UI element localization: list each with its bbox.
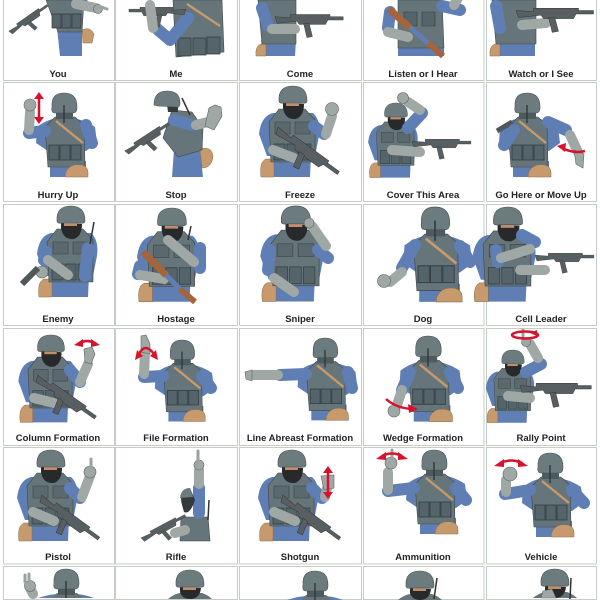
- panel: Hostage: [116, 204, 238, 326]
- panel: Pistol: [4, 448, 114, 564]
- icon: soldier with clenched hand raised: [259, 86, 341, 190]
- label: Dog: [414, 314, 432, 325]
- label: Freeze: [285, 190, 315, 201]
- icon: soldier raising arm above head: [368, 92, 471, 178]
- icon: soldier from back with raised hand and red arrows: [135, 335, 214, 421]
- label: Listen or I Hear: [388, 69, 458, 80]
- icon: soldier with finger pointing up holding rifle: [17, 450, 101, 555]
- icon: soldier holding rifle across body: [137, 208, 200, 302]
- icon: soldier arm lowered with red sweep arrow: [386, 336, 462, 422]
- panel: Wedge Formation: [364, 328, 484, 446]
- label: Shotgun: [281, 552, 319, 563]
- icon: soldier with raised hand and red up-down arrow: [258, 450, 342, 555]
- panel: Vehicle: [486, 448, 596, 564]
- icon: soldier reaching down with open hand: [378, 207, 472, 302]
- icon: soldier signalling watch: [490, 0, 594, 56]
- label: Rifle: [166, 552, 186, 563]
- icon: soldier with arm across chest and SMG: [473, 207, 594, 302]
- label: Hurry Up: [38, 190, 79, 201]
- label: Wedge Formation: [383, 433, 463, 444]
- icon: soldier pointing at self: [129, 0, 224, 57]
- label: Cover This Area: [387, 190, 460, 201]
- icon: soldier pointing at you: [8, 0, 107, 56]
- panel: Freeze: [240, 82, 362, 202]
- label: Enemy: [42, 314, 74, 325]
- icon: soldier holding a pistol: [22, 206, 97, 297]
- icon: soldier with raised hand and red arc arrow: [18, 335, 100, 434]
- panel: Listen or I Hear: [364, 0, 484, 80]
- label: Go Here or Move Up: [495, 190, 587, 201]
- icon: soldier with hand to eye: [260, 206, 328, 302]
- panel: bottom row cell 5: [486, 566, 596, 600]
- panel: You: [4, 0, 114, 80]
- icon: soldier head and mask: [168, 570, 212, 599]
- label: Column Formation: [16, 433, 100, 444]
- panel: Cover This Area: [364, 82, 484, 202]
- label: Pistol: [45, 552, 71, 563]
- panel: bottom row cell 4: [364, 566, 484, 600]
- panel: Rifle: [116, 448, 238, 564]
- icon: soldier beckoning: [256, 0, 343, 56]
- icon: soldier with raised fist and red up-down arrow: [24, 92, 97, 177]
- icon: soldier with arm extended sideways: [245, 338, 357, 420]
- icon: soldier from back with raised fist and red arrow: [494, 453, 584, 537]
- icon: soldier with arm forward and red arrow: [497, 93, 585, 177]
- panel: Column Formation: [4, 328, 114, 446]
- panel: Cell Leader: [473, 204, 596, 326]
- icon: soldier with arm straight up: [140, 451, 210, 551]
- panel: Shotgun: [240, 448, 362, 564]
- icon: soldier head and mask with antenna: [398, 571, 442, 600]
- panel: bottom row cell 1: [4, 566, 114, 600]
- panel: Ammunition: [364, 448, 484, 564]
- icon: soldier listening: [388, 0, 460, 56]
- label: Vehicle: [525, 552, 557, 563]
- panel: Go Here or Move Up: [486, 82, 596, 202]
- label: File Formation: [143, 433, 209, 444]
- panel: Line Abreast Formation: [240, 328, 362, 446]
- icon: soldier with OK hand sign: [24, 569, 94, 598]
- icon: soldier with gas mask and antenna: [533, 569, 577, 599]
- label: Me: [169, 69, 183, 80]
- icon: soldier head from back: [287, 571, 343, 600]
- label: Stop: [165, 190, 187, 201]
- panel: Enemy: [4, 204, 114, 326]
- panel: Rally Point: [486, 328, 596, 446]
- label: Line Abreast Formation: [247, 433, 353, 444]
- panel: Watch or I See: [486, 0, 596, 80]
- label: Watch or I See: [508, 69, 574, 80]
- label: You: [49, 69, 67, 80]
- icon: soldier from back with raised hand and red arrow: [376, 450, 467, 534]
- panel: bottom row cell 2: [116, 566, 238, 600]
- panel: Sniper: [240, 204, 362, 326]
- icon: soldier showing flat palm: [124, 91, 222, 177]
- label: Come: [287, 69, 313, 80]
- label: Ammunition: [395, 552, 451, 563]
- panel: Me: [116, 0, 238, 80]
- panel: Dog: [364, 204, 484, 326]
- panel: Come: [240, 0, 362, 80]
- label: Cell Leader: [515, 314, 567, 325]
- panel: File Formation: [116, 328, 238, 446]
- panel: bottom row cell 3: [240, 566, 362, 600]
- label: Rally Point: [516, 433, 566, 444]
- label: Hostage: [157, 314, 195, 325]
- label: Sniper: [285, 314, 315, 325]
- panel: Stop: [116, 82, 238, 202]
- icon: soldier pointing up with red circular arrow: [486, 330, 591, 423]
- panel: Hurry Up: [4, 82, 114, 202]
